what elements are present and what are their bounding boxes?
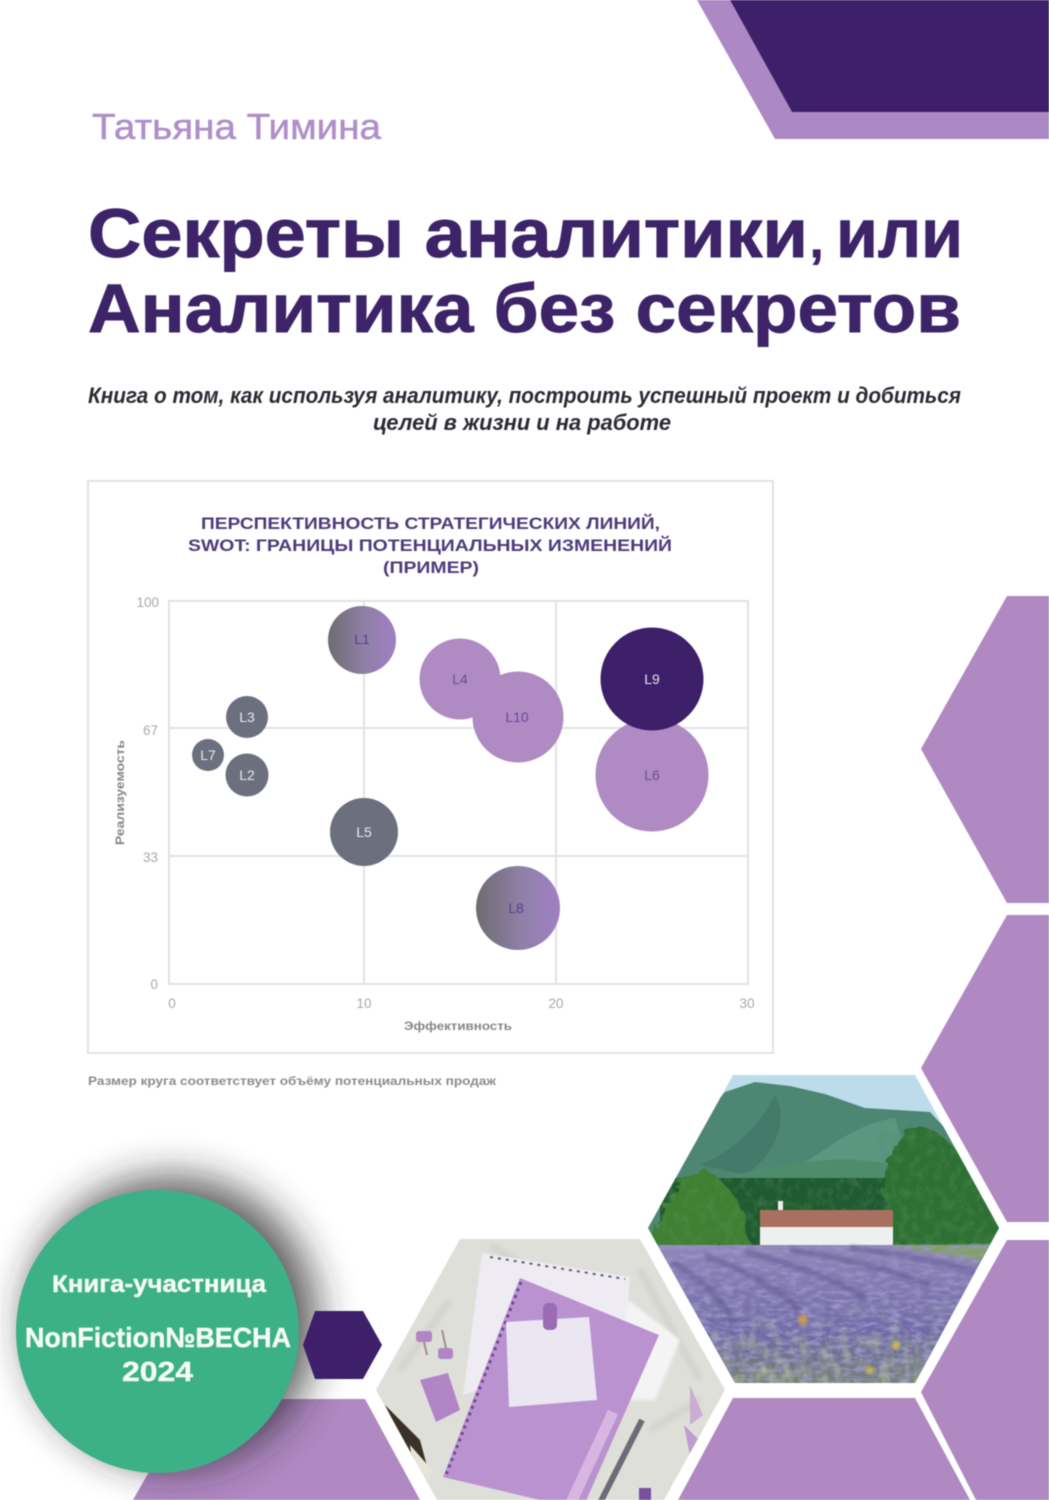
title: Секреты аналитики <box>88 195 808 272</box>
subtitle: Книга о том, как используя аналитику, построить успешный проект и добиться <box>88 383 961 408</box>
chart title <box>188 514 672 577</box>
author name: Татьяна Тимина <box>92 106 382 147</box>
top right corner hexagon <box>697 0 1049 139</box>
x axis title: Эффективность <box>404 1019 512 1033</box>
title <box>88 195 963 347</box>
eraser <box>420 1373 460 1422</box>
chart title: (ПРИМЕР) <box>383 558 479 577</box>
x axis ticks: 0 <box>168 996 176 1011</box>
pens <box>570 1412 613 1500</box>
chart footnote: Размер круга соответствует объёму потенциальных продаж <box>88 1074 497 1088</box>
bubble L3: L3 <box>239 709 255 725</box>
panel: bubble chart <box>88 481 773 1053</box>
sticky note <box>506 1317 597 1407</box>
small dark hexagon <box>303 1311 382 1379</box>
bubble L2: L2 <box>239 767 255 783</box>
bubble L10: L10 <box>505 709 529 725</box>
right hexagons <box>921 596 1049 1500</box>
title: Аналитика без секретов <box>88 270 961 347</box>
bubble L9 <box>600 628 704 730</box>
y axis ticks: 100 <box>136 595 159 610</box>
bubble L7: L7 <box>200 747 216 763</box>
badge shadow <box>26 1176 318 1468</box>
bubble L1: L1 <box>354 631 370 647</box>
badge: book participant: 2024 <box>122 1356 193 1387</box>
bubble L3 <box>226 696 268 738</box>
clip on note <box>543 1303 557 1330</box>
bubble L4: L4 <box>452 671 468 687</box>
y axis ticks: 33 <box>143 850 158 865</box>
chart title: SWOT: ГРАНИЦЫ ПОТЕНЦИАЛЬНЫХ ИЗМЕНЕНИЙ <box>188 536 672 555</box>
bubble L2 <box>226 754 268 796</box>
badge: book participant: NonFiction№BECHA <box>25 1322 291 1353</box>
badge: book participant <box>16 1190 299 1473</box>
chart title: ПЕРСПЕКТИВНОСТЬ СТРАТЕГИЧЕСКИХ ЛИНИЙ, <box>201 514 660 533</box>
white paper <box>463 1253 630 1395</box>
bubble L8 <box>476 866 560 950</box>
bubble L5 <box>330 798 398 866</box>
dark corner object <box>384 1405 427 1464</box>
bubble L8: L8 <box>508 900 524 916</box>
bubble L5: L5 <box>356 824 372 840</box>
title: или <box>836 195 963 272</box>
bubble L6: L6 <box>644 767 660 783</box>
bubble L9: L9 <box>644 671 660 687</box>
bubble L7 <box>192 739 224 771</box>
y axis ticks: 67 <box>143 723 158 738</box>
x axis ticks: 10 <box>356 996 372 1011</box>
subtitle <box>88 383 961 435</box>
y axis ticks <box>136 595 159 992</box>
y axis ticks: 0 <box>150 977 158 992</box>
bubble L1 <box>328 606 396 674</box>
photo: lavender field landscape <box>640 1070 1010 1390</box>
title: , <box>810 215 823 268</box>
y axis title: Реализуемость <box>113 740 127 845</box>
bubble L4 <box>420 638 500 720</box>
bubble L10 <box>472 672 564 762</box>
purple notebook <box>443 1278 659 1500</box>
x axis ticks <box>168 996 755 1011</box>
bubble L6 <box>596 718 708 832</box>
x axis ticks: 30 <box>739 996 755 1011</box>
subtitle: целей в жизни и на работе <box>373 410 671 435</box>
bottom hexagons <box>133 1398 970 1500</box>
badge: book participant: Книга-участница <box>52 1271 267 1298</box>
photo: notebook with purple stationery <box>370 1235 730 1500</box>
paper clips <box>416 1331 651 1500</box>
x axis ticks: 20 <box>548 996 564 1011</box>
